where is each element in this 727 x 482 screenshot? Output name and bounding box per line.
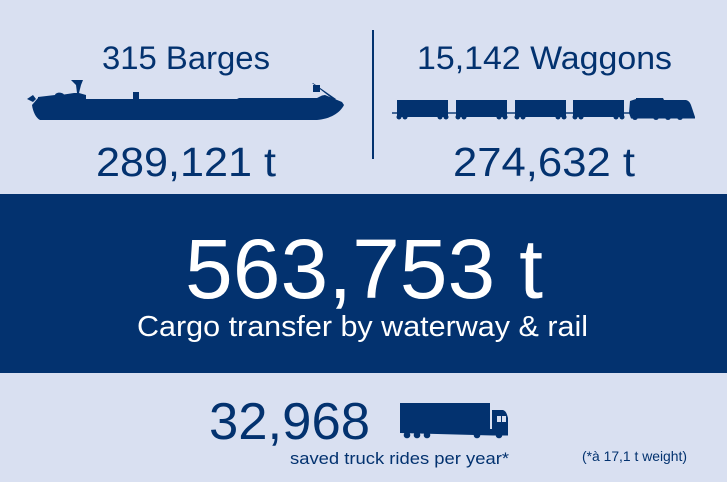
- panel: total cargo band: [0, 194, 727, 373]
- footnote: (*à 17,1 t weight): [582, 448, 687, 464]
- saved truck rides number: 32,968: [209, 393, 370, 451]
- icon: barge: [27, 80, 344, 120]
- heading: 315 barges: 315 Barges: [102, 40, 270, 76]
- band caption: Cargo transfer by waterway & rail: [137, 311, 588, 343]
- value: waggons tonnage: 274,632 t: [453, 139, 636, 185]
- heading: 15,142 waggons: 15,142 Waggons: [417, 40, 672, 76]
- value: barges tonnage: 289,121 t: [96, 139, 277, 185]
- total tonnage: 563,753 t: [185, 222, 543, 316]
- saved truck rides caption: saved truck rides per year*: [290, 449, 509, 468]
- icon: train: [392, 98, 695, 120]
- divider: [372, 30, 374, 159]
- icon: truck: [400, 403, 508, 438]
